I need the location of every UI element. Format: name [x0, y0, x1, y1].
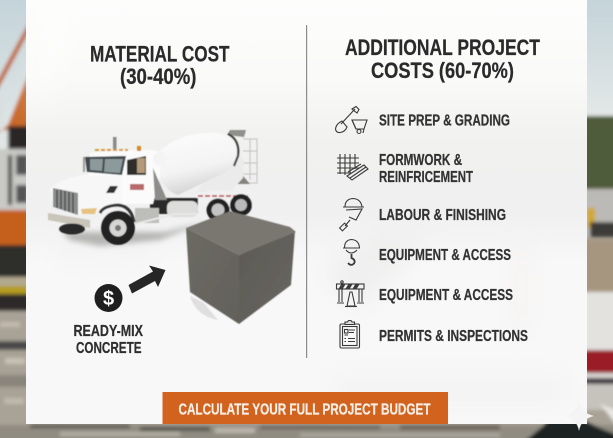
rear drum cone	[196, 145, 244, 195]
item: equipment and access, barrier: EQUIPMENT & ACCESS	[379, 287, 513, 304]
heading: additional project costs: ADDITIONAL PROJECT	[345, 35, 540, 60]
label: ready-mix concrete: CONCRETE	[76, 340, 142, 357]
item: labour and finishing	[340, 198, 506, 231]
cube top face	[186, 211, 296, 255]
icon: dollar badge	[94, 284, 122, 312]
icon: hard hat and crane hook	[343, 240, 360, 265]
icon: clipboard checklist	[340, 320, 360, 348]
illustration: concrete mixer truck	[48, 130, 257, 246]
heading: material cost	[90, 42, 230, 89]
sparkle mark	[564, 401, 594, 431]
item: formwork and reinforcement: FORMWORK &	[379, 152, 462, 169]
bumper	[48, 213, 90, 228]
heading: additional project costs: COSTS (60-70%)	[371, 58, 514, 83]
call to action button	[162, 392, 448, 424]
item: permits and inspections: PERMITS & INSPECTIONS	[379, 328, 528, 345]
arrow pointing to cube	[128, 266, 166, 294]
front wheels	[59, 224, 85, 234]
item: labour and finishing: LABOUR & FINISHING	[379, 207, 506, 224]
cube right face	[239, 231, 295, 324]
icon: rebar mesh and planks	[337, 154, 368, 180]
illustration: concrete cube	[186, 211, 296, 324]
cab roof lights and stack	[113, 137, 116, 149]
item: equipment and access, barrier	[336, 281, 513, 306]
label: ready-mix concrete	[74, 323, 144, 357]
item: permits and inspections	[340, 320, 528, 348]
divider	[306, 25, 307, 358]
heading: additional project costs	[345, 35, 540, 83]
door logo	[130, 184, 144, 190]
hood vents	[106, 186, 118, 193]
item: equipment and access: EQUIPMENT & ACCESS	[379, 247, 511, 264]
item: formwork and reinforcement	[337, 152, 473, 186]
item: site prep and grading	[336, 106, 510, 134]
icon: shovel and wheelbarrow	[336, 106, 367, 134]
item: equipment and access	[343, 240, 511, 265]
cube left face	[186, 228, 239, 324]
item: formwork and reinforcement: REINFRICEMENT	[379, 169, 473, 186]
engine side fittings	[153, 152, 167, 166]
call to action button: CALCULATE YOUR FULL PROJECT BUDGET	[178, 402, 431, 418]
cube reflection	[190, 296, 218, 320]
item: site prep and grading: SITE PREP & GRADING	[379, 112, 510, 130]
rear wheels	[206, 198, 230, 222]
icon: road barrier and cone	[336, 281, 364, 306]
label: ready-mix concrete: READY-MIX	[74, 323, 144, 340]
cab	[88, 150, 160, 204]
chassis frame	[197, 192, 253, 206]
hood	[50, 175, 124, 215]
icon: hard hat and trowel	[340, 198, 364, 231]
heading: material cost: MATERIAL COST	[90, 42, 230, 66]
mixer drum	[158, 133, 238, 195]
grille	[53, 188, 78, 215]
ladder and platform	[243, 139, 257, 183]
truck ground shadow	[62, 222, 205, 246]
icon: dollar badge: $	[103, 288, 114, 310]
heading: material cost: (30-40%)	[120, 64, 196, 89]
